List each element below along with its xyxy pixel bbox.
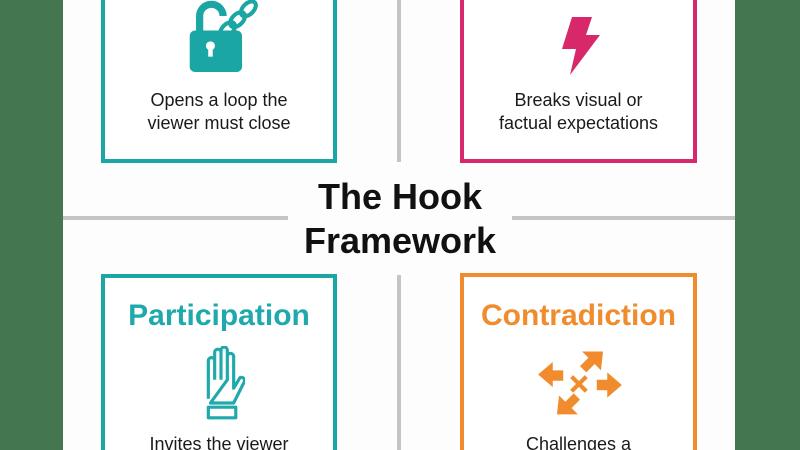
icon: unlocked padlock with chain [190, 0, 258, 72]
icon: raised hand [206, 346, 245, 420]
heading: Contradiction: Contradiction [481, 299, 676, 332]
text: curiosity description [147, 90, 291, 133]
panel: participation box [101, 274, 337, 450]
text: surprise description: Breaks visual or [514, 90, 643, 110]
title: The Hook [318, 176, 482, 217]
panel: surprise box [460, 0, 697, 163]
heading: Participation: Participation [128, 299, 310, 332]
title [304, 176, 496, 261]
text: surprise description: factual expectations [499, 113, 658, 133]
text: surprise description [499, 90, 658, 133]
icon: diverging arrows [538, 352, 622, 414]
panel: curiosity box [101, 0, 337, 163]
icon: lightning bolt [562, 17, 600, 75]
title: Framework [304, 220, 496, 261]
text: curiosity description: viewer must close [147, 113, 291, 133]
text: curiosity description: Opens a loop the [150, 90, 288, 110]
panel: contradiction box [460, 273, 697, 450]
